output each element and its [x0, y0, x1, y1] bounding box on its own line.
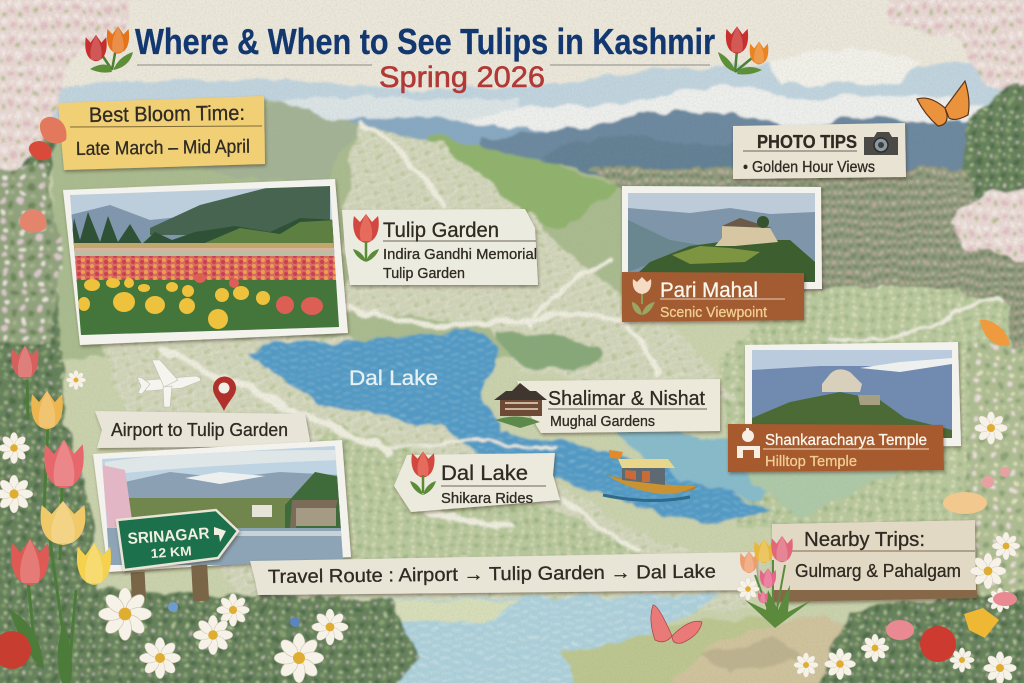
icon: camera	[864, 132, 898, 155]
top-right blossom and tree	[890, 0, 1024, 110]
sign: srinagar 12 km: 12 KM	[150, 543, 192, 561]
label: pari mahal subtitle: Scenic Viewpoint	[660, 305, 767, 321]
terrain: central map blocks	[100, 335, 760, 610]
icon: tulip bouquet	[736, 536, 812, 628]
sign: srinagar 12 km	[117, 510, 238, 602]
icon: tulip	[410, 452, 436, 495]
roads	[164, 124, 1000, 550]
icon: red tulip	[353, 214, 379, 262]
banner: travel route	[250, 552, 758, 595]
sign: nearby trips	[772, 520, 977, 602]
terrain: town	[590, 168, 1024, 345]
note: best bloom time	[58, 96, 265, 170]
icon: airplane	[137, 360, 200, 407]
photo: tulip field	[60, 179, 350, 345]
title	[135, 21, 715, 94]
label: shalimar subtitle: Mughal Gardens	[550, 413, 655, 430]
label: shalimar title: Shalimar & Nishat	[548, 388, 705, 410]
label: photo tip: • Golden Hour Views	[743, 159, 875, 176]
bottom-left meadow	[0, 590, 420, 683]
flowers: right side	[794, 320, 1020, 683]
label: nearby trips heading: Nearby Trips:	[804, 529, 925, 551]
sign: pari mahal	[622, 272, 804, 322]
icon: pink butterfly	[651, 605, 702, 643]
icon: coral flowers on bloom note	[20, 117, 66, 233]
icon: temple	[737, 428, 760, 458]
sign: srinagar 12 km: SRINAGAR	[127, 525, 210, 548]
note: photo tips	[733, 123, 906, 179]
label: tulip garden description: Indira Gandhi Memorial	[383, 246, 537, 263]
label: tulip garden: Tulip Garden	[383, 265, 465, 282]
icon: map pin	[213, 376, 236, 411]
label: best bloom heading: Best Bloom Time:	[89, 102, 245, 127]
banner: travel route: Travel Route : Airport → Tulip Garden → Dal Lake	[268, 562, 716, 588]
label: dal lake shikara rides	[394, 452, 560, 512]
label: temple subtitle: Hilltop Temple	[765, 453, 857, 470]
label: airport to tulip garden: Airport to Tulip Garden	[111, 420, 288, 440]
left foliage	[0, 60, 95, 683]
heading: main title: Where & When to See Tulips in Kashmir	[135, 21, 715, 62]
label: dal lake subtitle: Shikara Rides	[441, 490, 533, 507]
icon: tulips left of title	[85, 26, 133, 73]
terrain: hills	[50, 100, 650, 360]
icon: pagoda	[494, 383, 547, 428]
label: nearby destinations: Gulmarg & Pahalgam	[795, 561, 961, 581]
label: shalimar and nishat	[517, 379, 720, 433]
heading: subtitle: Spring 2026	[379, 61, 545, 94]
label: tulip garden	[342, 209, 538, 285]
terrain: bottom water	[340, 595, 720, 683]
icon: shikara boat	[602, 450, 698, 501]
label: dal lake title: Dal Lake	[441, 462, 528, 485]
label: dal lake on map: Dal Lake	[349, 367, 438, 390]
icon: orange butterfly	[917, 81, 969, 126]
photo: pari mahal	[622, 186, 822, 290]
flowers: bottom white daisies	[99, 588, 348, 683]
photo: road to srinagar	[93, 440, 351, 572]
icon: cream tulip	[632, 277, 655, 315]
label: bloom dates: Late March – Mid April	[76, 137, 250, 160]
label: photo tips heading: PHOTO TIPS	[757, 132, 857, 152]
photo: shankaracharya temple	[745, 342, 961, 448]
label: tulip garden title: Tulip Garden	[383, 219, 499, 242]
flowers: left tulips	[0, 346, 111, 683]
terrain: lake	[248, 330, 770, 525]
icon: tulips right of title	[718, 26, 768, 74]
sign: shankaracharya temple	[728, 424, 944, 472]
label: pari mahal title: Pari Mahal	[660, 279, 758, 302]
label: airport to tulip garden	[95, 411, 310, 448]
right edge meadow	[960, 345, 1024, 600]
label: temple title: Shankaracharya Temple	[765, 432, 927, 449]
